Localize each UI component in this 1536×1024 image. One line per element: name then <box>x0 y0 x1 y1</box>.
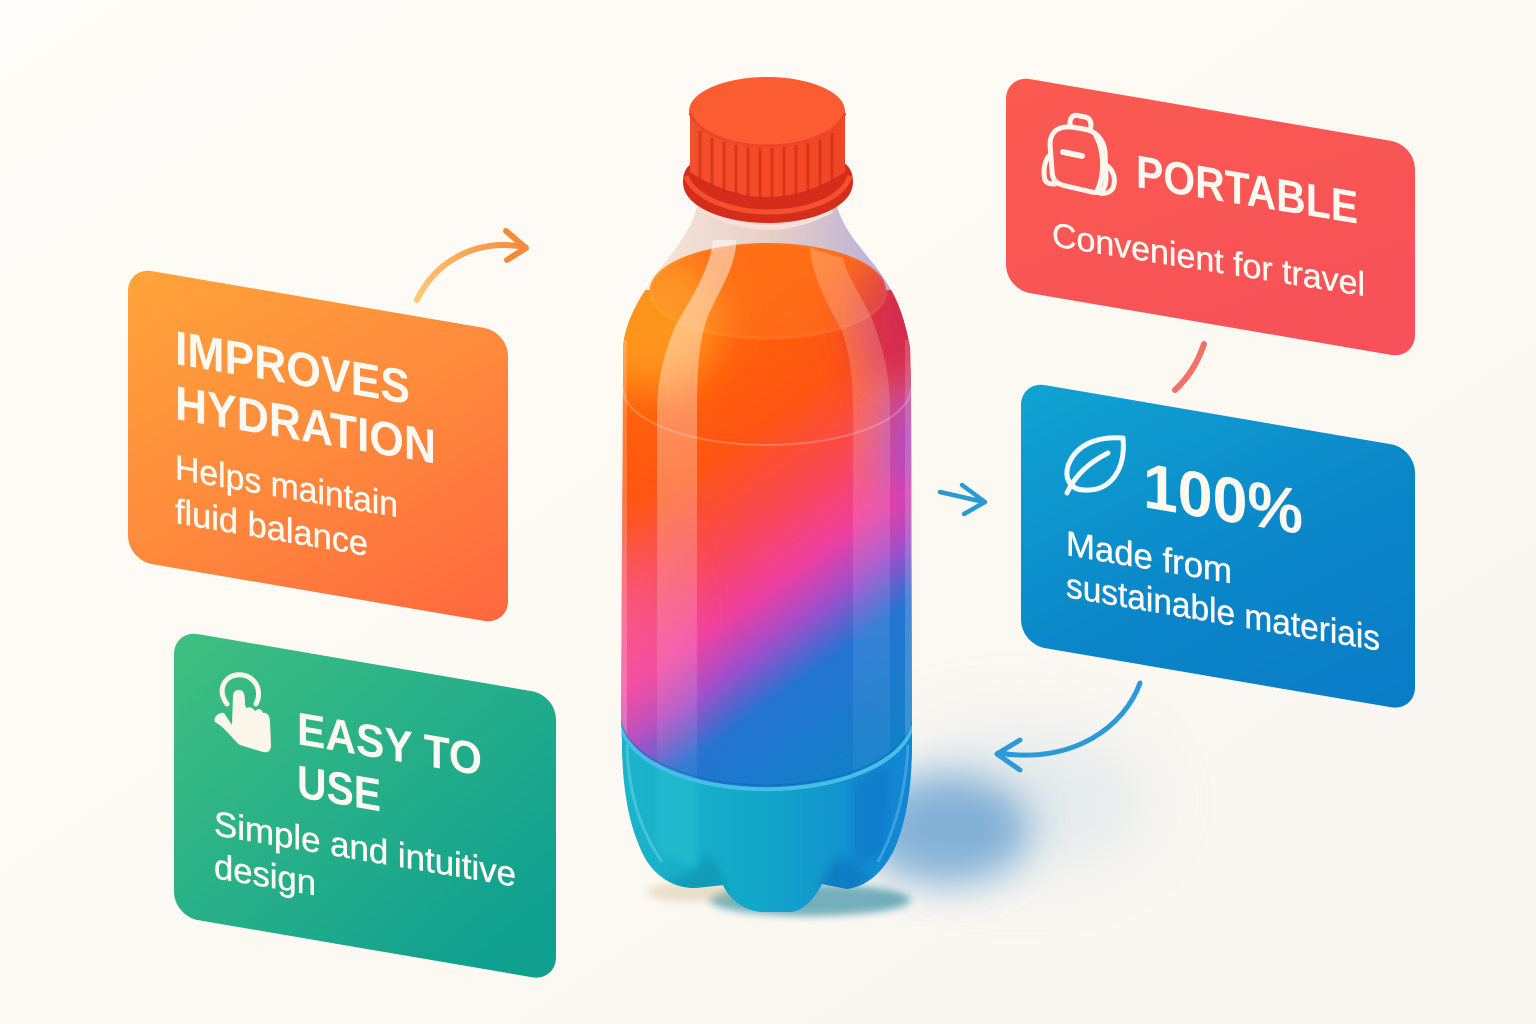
liquid <box>621 243 912 912</box>
left glare stripe <box>657 240 736 780</box>
arrow: bottle to blue card <box>940 485 985 514</box>
card shape <box>128 267 508 625</box>
description: Convenient for travel <box>1052 216 1365 304</box>
band line <box>621 725 912 789</box>
bottle <box>621 77 912 912</box>
heading: PORTABLE <box>1136 145 1358 234</box>
icon: leaf <box>1067 438 1123 493</box>
body seam <box>623 388 911 445</box>
heading: USE <box>297 755 381 821</box>
panel: easy to use <box>174 630 556 981</box>
description: design <box>214 847 316 903</box>
panel: 100% sustainable <box>1021 381 1415 711</box>
base rim highlights <box>627 745 662 862</box>
arrow: orange curve to bottle <box>417 231 526 300</box>
washer ring <box>703 210 832 228</box>
icon: tapping hand <box>215 675 271 752</box>
heading: 100% <box>1143 449 1303 548</box>
base section <box>621 726 912 912</box>
description: Helps maintain <box>175 448 398 525</box>
bottle shadow <box>647 730 1150 916</box>
cap collar <box>683 160 853 223</box>
description: Made from <box>1066 524 1232 591</box>
arrow: blue card curve back to bottle <box>997 683 1140 770</box>
panel: improves hydration <box>128 267 508 625</box>
heading: IMPROVES <box>175 321 410 415</box>
card shape <box>1021 381 1415 711</box>
heading <box>175 321 436 475</box>
heading: EASY TO <box>297 702 482 786</box>
cap ribs <box>700 131 832 198</box>
right glare stripe <box>810 248 890 780</box>
heading <box>297 702 482 821</box>
connector: portable to blue card <box>1175 344 1204 390</box>
cap top <box>689 77 845 145</box>
heading: HYDRATION <box>175 376 436 475</box>
description: sustainable materiais <box>1066 566 1380 659</box>
cap skirt <box>690 111 845 197</box>
bottle body <box>621 207 912 912</box>
description: Simple and intuitive <box>214 804 516 895</box>
icon: backpack <box>1044 115 1114 193</box>
description <box>175 448 398 564</box>
side lobes shading <box>667 858 728 892</box>
infographic canvas <box>128 77 1415 978</box>
description: fluid balance <box>175 492 368 564</box>
description <box>1066 524 1380 659</box>
liquid surface <box>650 244 886 338</box>
panel: portable <box>1006 75 1415 359</box>
edge rims <box>905 340 912 738</box>
card shape <box>1006 75 1415 359</box>
base glare <box>661 765 694 863</box>
card shape <box>174 630 556 981</box>
